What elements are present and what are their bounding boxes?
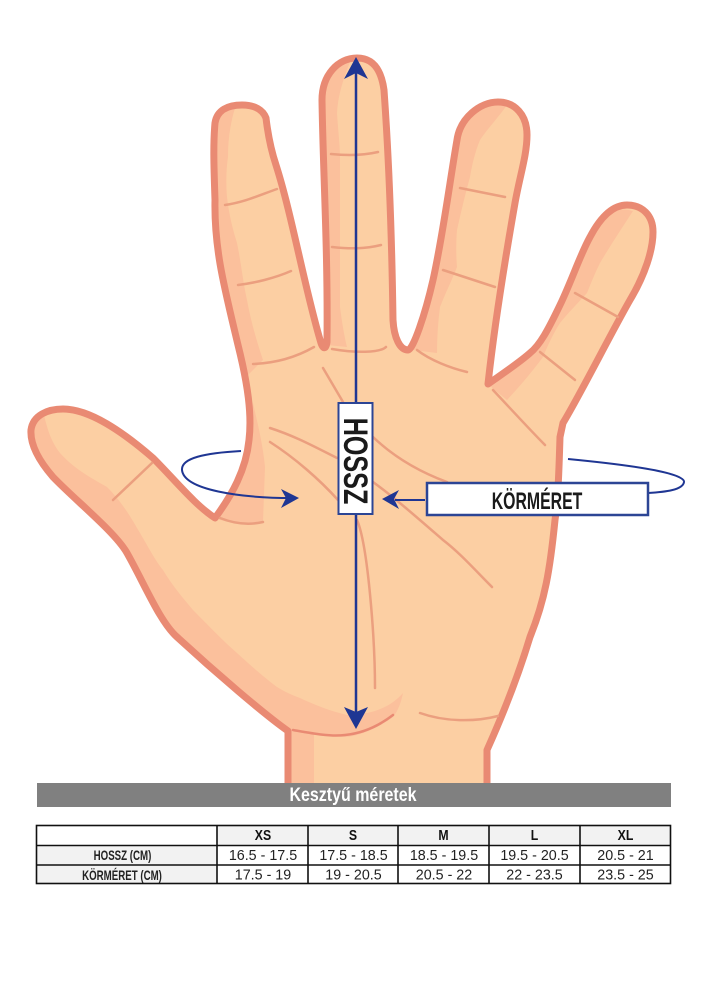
arrowhead top: [344, 57, 368, 79]
row: hossz: HOSSZ (CM): [94, 849, 151, 863]
table header row: M: [438, 827, 449, 843]
finger shading: [215, 62, 633, 400]
hand silhouette: [31, 58, 653, 790]
size table: [36, 825, 671, 884]
thumb and palm shading: [31, 415, 403, 737]
table header row: [255, 827, 633, 843]
hand outline: [31, 58, 653, 783]
row: hossz: [94, 848, 654, 864]
table header row: S: [349, 827, 357, 843]
label: körméret: KÖRMÉRET: [492, 488, 583, 515]
table grid: [36, 825, 671, 884]
row: hossz: 20.5 - 21: [597, 848, 654, 864]
table header row: XL: [618, 827, 633, 843]
row: hossz: 17.5 - 18.5: [319, 848, 388, 864]
row: hossz: 19.5 - 20.5: [500, 848, 569, 864]
row: hossz: 18.5 - 19.5: [410, 848, 478, 864]
row: körméret: 17.5 - 19: [235, 868, 291, 884]
arrowhead bottom: [344, 707, 368, 729]
right circumference arrow: [382, 459, 684, 509]
title bar: [37, 783, 671, 807]
row: körméret: 22 - 23.5: [506, 868, 563, 884]
row: körméret: 23.5 - 25: [597, 868, 654, 884]
label: hossz: HOSSZ: [336, 418, 374, 504]
palm creases: [113, 152, 618, 736]
table header row: XS: [255, 827, 271, 843]
row: körméret: [82, 868, 654, 884]
wrist shading: [288, 733, 314, 790]
row: hossz: 16.5 - 17.5: [229, 848, 297, 864]
length arrow: [344, 57, 368, 729]
left circumference arrow: [182, 451, 299, 508]
hand illustration: [31, 58, 653, 790]
row: körméret: 19 - 20.5: [325, 868, 382, 884]
title bar: Kesztyű méretek: [289, 784, 417, 805]
row: körméret: 20.5 - 22: [416, 868, 472, 884]
label: körméret: [427, 483, 648, 515]
table header row: L: [531, 827, 538, 843]
thumb web shading: [217, 403, 265, 523]
row: körméret: KÖRMÉRET (CM): [82, 869, 162, 883]
table cell fills: [37, 826, 671, 884]
